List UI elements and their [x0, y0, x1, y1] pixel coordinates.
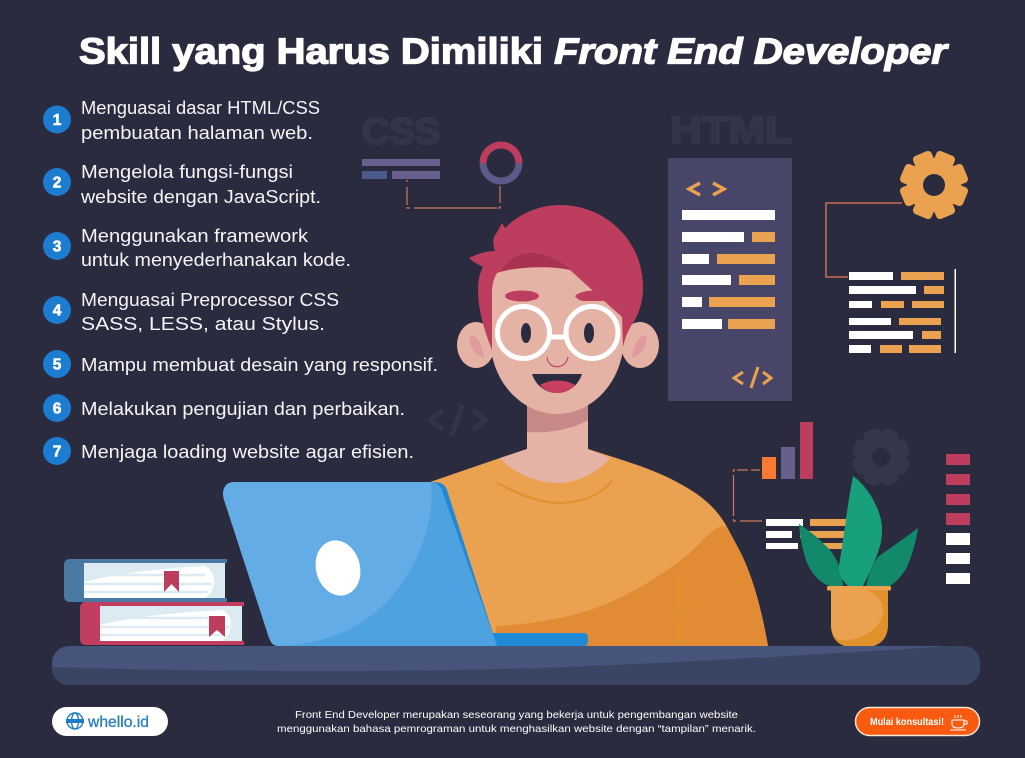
skill 5: Mampu membuat desain yang responsif.	[81, 354, 438, 375]
title: Skill yang Harus Dimiliki Front End Developer	[79, 30, 949, 72]
hair shadow	[500, 253, 570, 272]
nose	[547, 357, 568, 367]
skill 2: 2	[53, 174, 61, 192]
logo pill	[52, 707, 168, 736]
neck	[500, 400, 610, 483]
leaf right	[866, 528, 918, 586]
skill 7: Menjaga loading website agar efisien.	[81, 441, 414, 462]
html panel	[668, 110, 792, 401]
skill 4: SASS, LESS, atau Stylus.	[81, 313, 325, 334]
footer description: Front End Developer merupakan seseorang yang bekerja untuk pengembangan website	[295, 709, 738, 721]
call to action button: Mulai konsultasi!	[870, 717, 944, 728]
skill 7	[43, 437, 414, 465]
skill 4: Menguasai Preprocessor CSS	[81, 289, 339, 310]
skill 2	[43, 161, 321, 207]
footer description	[277, 709, 756, 735]
icon: gear with code block	[826, 141, 978, 353]
skill 3	[43, 225, 351, 270]
html panel: HTML	[670, 110, 792, 152]
skill 1: Menguasai dasar HTML/CSS	[81, 97, 320, 118]
hair	[469, 205, 643, 350]
shirt	[430, 449, 768, 646]
plant	[799, 476, 918, 647]
logo pill: whello.id	[87, 714, 149, 731]
skill 6: 6	[53, 400, 62, 418]
glasses	[498, 306, 618, 358]
color block stack	[946, 454, 970, 584]
skill 1: 1	[53, 112, 62, 129]
skill 4: 4	[53, 302, 62, 320]
footer description: menggunakan bahasa pemrograman untuk menghasilkan website dengan “tampilan” menarik.	[277, 723, 756, 735]
skill list	[43, 97, 438, 465]
skill 5	[43, 350, 438, 378]
skill 1: pembuatan halaman web.	[81, 122, 313, 143]
laptop	[223, 482, 588, 646]
skill 2: website dengan JavaScript.	[80, 186, 321, 207]
books	[64, 559, 244, 645]
top book	[64, 559, 227, 602]
icon: laptop logo	[310, 535, 366, 601]
skill 3: 3	[53, 238, 62, 256]
css decoration: CSS	[362, 111, 440, 152]
desk	[52, 646, 980, 685]
skill 3: Menggunakan framework	[81, 225, 309, 246]
icon: coffee cup	[950, 715, 967, 730]
leaf center	[839, 476, 882, 586]
face	[490, 265, 624, 414]
ears	[457, 322, 659, 368]
eyes	[521, 323, 531, 343]
skill 5: 5	[53, 356, 62, 374]
character	[430, 205, 768, 646]
dim gear	[843, 419, 919, 495]
skill 6: Melakukan pengujian dan perbaikan.	[81, 398, 405, 419]
css decoration	[362, 111, 522, 208]
pot	[827, 586, 891, 647]
call to action button	[856, 708, 980, 736]
dim code tag	[431, 405, 485, 435]
skill 6	[43, 394, 405, 422]
bar chart with connector	[734, 422, 847, 549]
icon: globe	[66, 713, 84, 729]
leaf left	[799, 524, 843, 586]
skill 7: 7	[53, 444, 61, 460]
mouth	[532, 374, 582, 393]
skill 2: Mengelola fungsi-fungsi	[81, 161, 293, 182]
eyebrows	[505, 290, 539, 302]
skill 4	[43, 289, 339, 334]
skill 3: untuk menyederhanakan kode.	[81, 249, 351, 270]
skill 1	[43, 97, 320, 143]
bottom book	[80, 602, 244, 645]
